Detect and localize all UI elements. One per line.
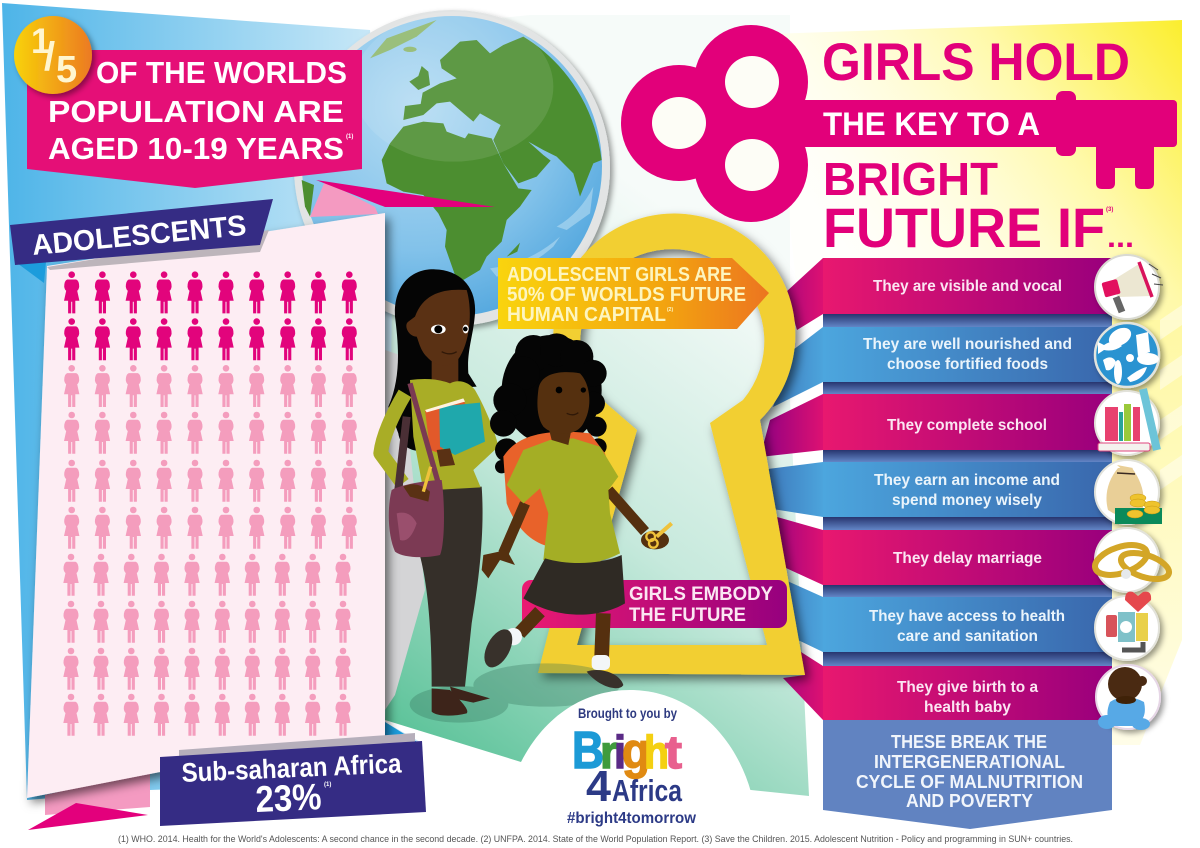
icon: baby [1096, 665, 1160, 730]
callout: adolescent girls 50%: ADOLESCENT GIRLS ARE [507, 264, 732, 286]
blue fold under sub-saharan banner [385, 722, 422, 760]
badge: 1/5 [14, 16, 92, 94]
ribbon 4: income: spend money wisely [892, 492, 1042, 509]
wordmark: Bright: g [622, 723, 650, 779]
ribbon 1: visible and vocal [823, 258, 1112, 314]
ribbon 7: healthy baby [823, 666, 1112, 720]
panel: adolescents population [27, 213, 422, 830]
ribbon 2: nourished [823, 327, 1112, 382]
footnote references: (1) WHO. 2014. Health for the World's Adolescents: A second chance in the second decade. (2) UNFPA. 2014. State of the World Population Report. (3) Save the Children. 2015. Adolescent Nutrition - Policy and programming in SUN+ countries. [118, 834, 1073, 845]
ribbon 5: delay marriage [823, 530, 1112, 585]
logo: Bright 4 Africa: 4 [586, 762, 612, 811]
ribbon 7: healthy baby: They give birth to a [897, 679, 1038, 696]
conclusion box: break the cycle: AND POVERTY [906, 790, 1034, 811]
continent: Africa [382, 122, 532, 280]
ribbon wings folding behind keyhole [760, 258, 823, 720]
ribbon 6: health care: care and sanitation [897, 628, 1038, 645]
conclusion box: break the cycle: CYCLE OF MALNUTRITION [856, 771, 1083, 792]
ribbon 1: visible and vocal: They are visible and vocal [873, 278, 1062, 295]
callout: girls embody the future [522, 580, 787, 628]
key shape [621, 25, 1177, 222]
callout tail pointing to Africa [310, 180, 495, 217]
headline box: one fifth of population: OF THE WORLDS [96, 55, 347, 90]
heading banner: adolescents [10, 199, 273, 283]
main heading: THE KEY TO A [823, 106, 1040, 142]
logo: Bright 4 Africa: Brought to you by [578, 705, 677, 721]
younger girl with backpack and key [479, 333, 672, 688]
banner: sub-saharan Africa 23%: (1) [324, 782, 331, 788]
ribbon 6: health care [823, 597, 1112, 652]
ribbon 2: nourished: They are well nourished and [863, 336, 1072, 353]
main heading: ... [1107, 221, 1134, 254]
main heading: (3) [1106, 207, 1113, 213]
wordmark: Bright: B [572, 722, 604, 780]
globe [294, 10, 610, 326]
illustration: two girls [381, 269, 672, 723]
icon: wedding rings [1091, 528, 1172, 592]
wordmark: Bright: h [644, 726, 669, 778]
headline box: one fifth of population: AGED 10-19 YEARS [48, 131, 344, 166]
main heading: GIRLS HOLD [822, 33, 1130, 92]
ribbon 3: complete school [823, 394, 1112, 450]
callout: adolescent girls 50% [498, 258, 769, 329]
background: yellow rays panel [770, 20, 1182, 745]
conclusion box: break the cycle [823, 720, 1112, 829]
ribbon 5: delay marriage: They delay marriage [893, 550, 1042, 567]
pale pink card [27, 213, 385, 798]
ribbon 3: complete school: They complete school [887, 417, 1047, 434]
heading banner: adolescents: ADOLESCENTS [31, 210, 248, 262]
icon: health [1095, 592, 1159, 660]
headline box: one fifth of population: (1) [346, 134, 353, 140]
conclusion box: break the cycle: THESE BREAK THE [891, 731, 1047, 752]
white arch behind logo [521, 690, 751, 840]
banner: sub-saharan Africa 23% [160, 733, 426, 826]
ribbon 6: health care: They have access to health [869, 608, 1065, 625]
callout: girls embody the future: THE FUTURE [629, 604, 746, 626]
icon: money bag and coins [1095, 460, 1162, 524]
wordmark: Bright [572, 722, 682, 780]
icon: foods [1095, 323, 1159, 387]
main heading: BRIGHT [823, 153, 998, 205]
logo: Bright 4 Africa: #bright4tomorrow [567, 810, 697, 827]
wordmark: Bright: i [614, 726, 626, 778]
main heading [822, 33, 1134, 259]
logo: Bright 4 Africa [567, 705, 697, 827]
background: blue sky panel [2, 3, 423, 800]
callout: girls embody the future: GIRLS EMBODY [629, 583, 773, 605]
headline box: one fifth of population: POPULATION ARE [48, 94, 344, 129]
headline box: one fifth of population [27, 50, 362, 188]
logo: Bright 4 Africa: Africa [612, 773, 683, 808]
ribbon fold bands [823, 314, 1112, 666]
icon: megaphone [1095, 255, 1163, 319]
ribbon 2: nourished: choose fortified foods [887, 356, 1048, 373]
pictogram: 100 female figures, 20 highlighted [63, 271, 357, 736]
background: mint keyhole field [385, 15, 809, 796]
callout: adolescent girls 50%: HUMAN CAPITAL [507, 304, 666, 326]
older girl with books and bag [381, 269, 498, 716]
callout: adolescent girls 50%: 50% OF WORLDS FUTURE [507, 284, 746, 306]
main heading: FUTURE IF [823, 196, 1105, 259]
ground shadows [410, 663, 620, 723]
keyhole opening showing pale background [577, 249, 767, 645]
badge: 1/5: / [44, 35, 55, 79]
keyhole [538, 214, 805, 675]
badge: 1/5: 5 [56, 49, 77, 91]
wordmark: Bright: t [665, 726, 682, 778]
conclusion box: break the cycle: INTERGENERATIONAL [874, 751, 1065, 772]
continent: Britain, Greenland, Iceland, Madagascar, S America [302, 20, 520, 257]
ribbon 4: income [823, 462, 1112, 517]
wordmark: Bright: r [600, 726, 618, 778]
ribbon 4: income: They earn an income and [874, 472, 1060, 489]
pink ribbon tail, bottom left [28, 770, 150, 830]
badge: 1/5: 1 [31, 22, 50, 61]
ribbon 7: healthy baby: health baby [924, 699, 1011, 716]
continent: Eurasia [403, 37, 602, 197]
grey floor shadow [385, 350, 425, 710]
banner: sub-saharan Africa 23%: Sub-saharan Africa [181, 748, 403, 788]
banner: sub-saharan Africa 23%: 23% [255, 776, 322, 820]
icon: books [1095, 389, 1159, 455]
callout: adolescent girls 50%: (2) [667, 307, 673, 313]
